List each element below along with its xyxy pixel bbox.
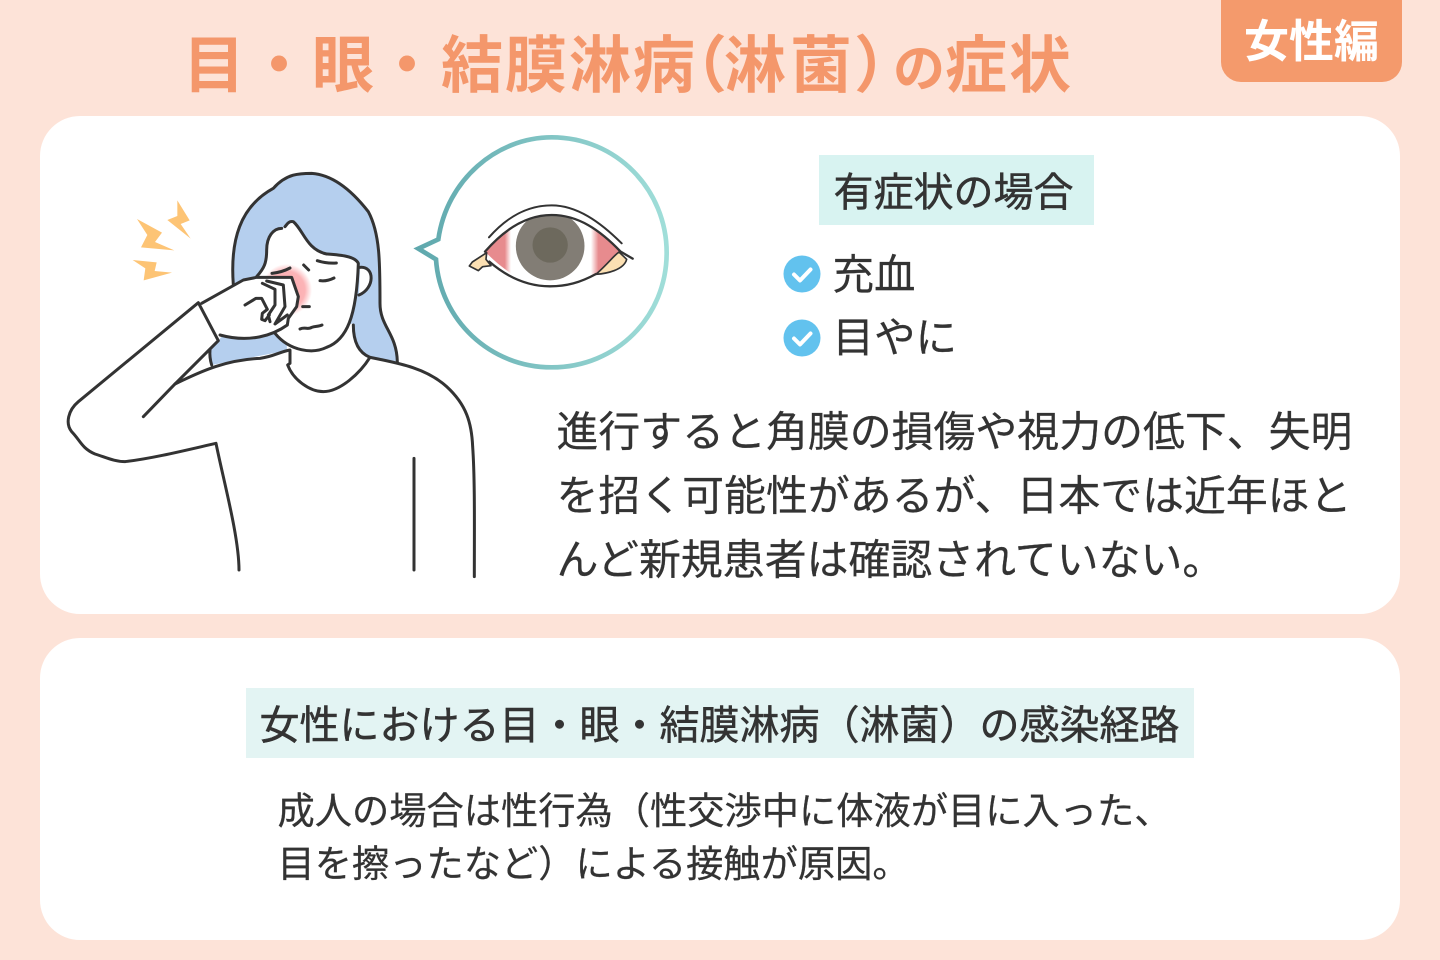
title: 結膜淋病 [441,32,695,101]
face [257,222,358,351]
title: 淋菌 [724,32,852,101]
hair [210,173,397,365]
redness [261,264,312,316]
title: 目 [183,32,245,101]
sweater arm and body [68,303,239,570]
symptom: 充血: 充血 [832,251,916,298]
heading: 有症状の場合 [819,155,1094,225]
text block: progression: んど新規患者は確認されていない。 [556,536,1224,584]
title: ・ [248,32,310,101]
badge: 女性編: 女性編 [1244,16,1379,67]
text block: infection route: 目を擦ったなど）による接触が原因。 [278,843,910,885]
symptom: 充血 [784,251,916,298]
title: 症状 [945,32,1071,101]
pain marks [133,200,191,280]
panel: symptoms [40,116,1400,614]
panel: infection route [40,638,1400,940]
text block: infection route: 成人の場合は性行為（性交渉中に体液が目に入った、 [278,790,1172,832]
title [183,32,1071,101]
text block: progression: を招く可能性があるが、日本では近年ほと [556,472,1352,520]
ear [359,267,371,295]
title: （ [665,32,727,101]
eyes, nose, mouth [272,261,336,329]
hand [202,277,298,341]
text block: progression: 進行すると角膜の損傷や視力の低下、失明 [556,408,1352,456]
title: ） [854,32,916,101]
text block: infection route [278,790,1172,885]
heading: 有症状の場合: 有症状の場合 [834,171,1074,215]
badge: 女性編 [1221,0,1402,82]
illustration: woman rubbing eye [68,173,474,577]
heading: infection route: 女性における目・眼・結膜淋病（淋菌）の感染経路 [260,704,1180,748]
neck [287,323,370,392]
symptom: 目やに: 目やに [832,314,957,361]
title: 眼 [312,32,374,101]
icon: red eye [469,205,633,286]
heading: infection route [246,688,1194,758]
speech bubble with eye [418,137,667,367]
title: ・ [376,32,438,101]
text block: progression [556,408,1352,584]
eye discharge [469,253,491,271]
title: の [893,41,945,99]
